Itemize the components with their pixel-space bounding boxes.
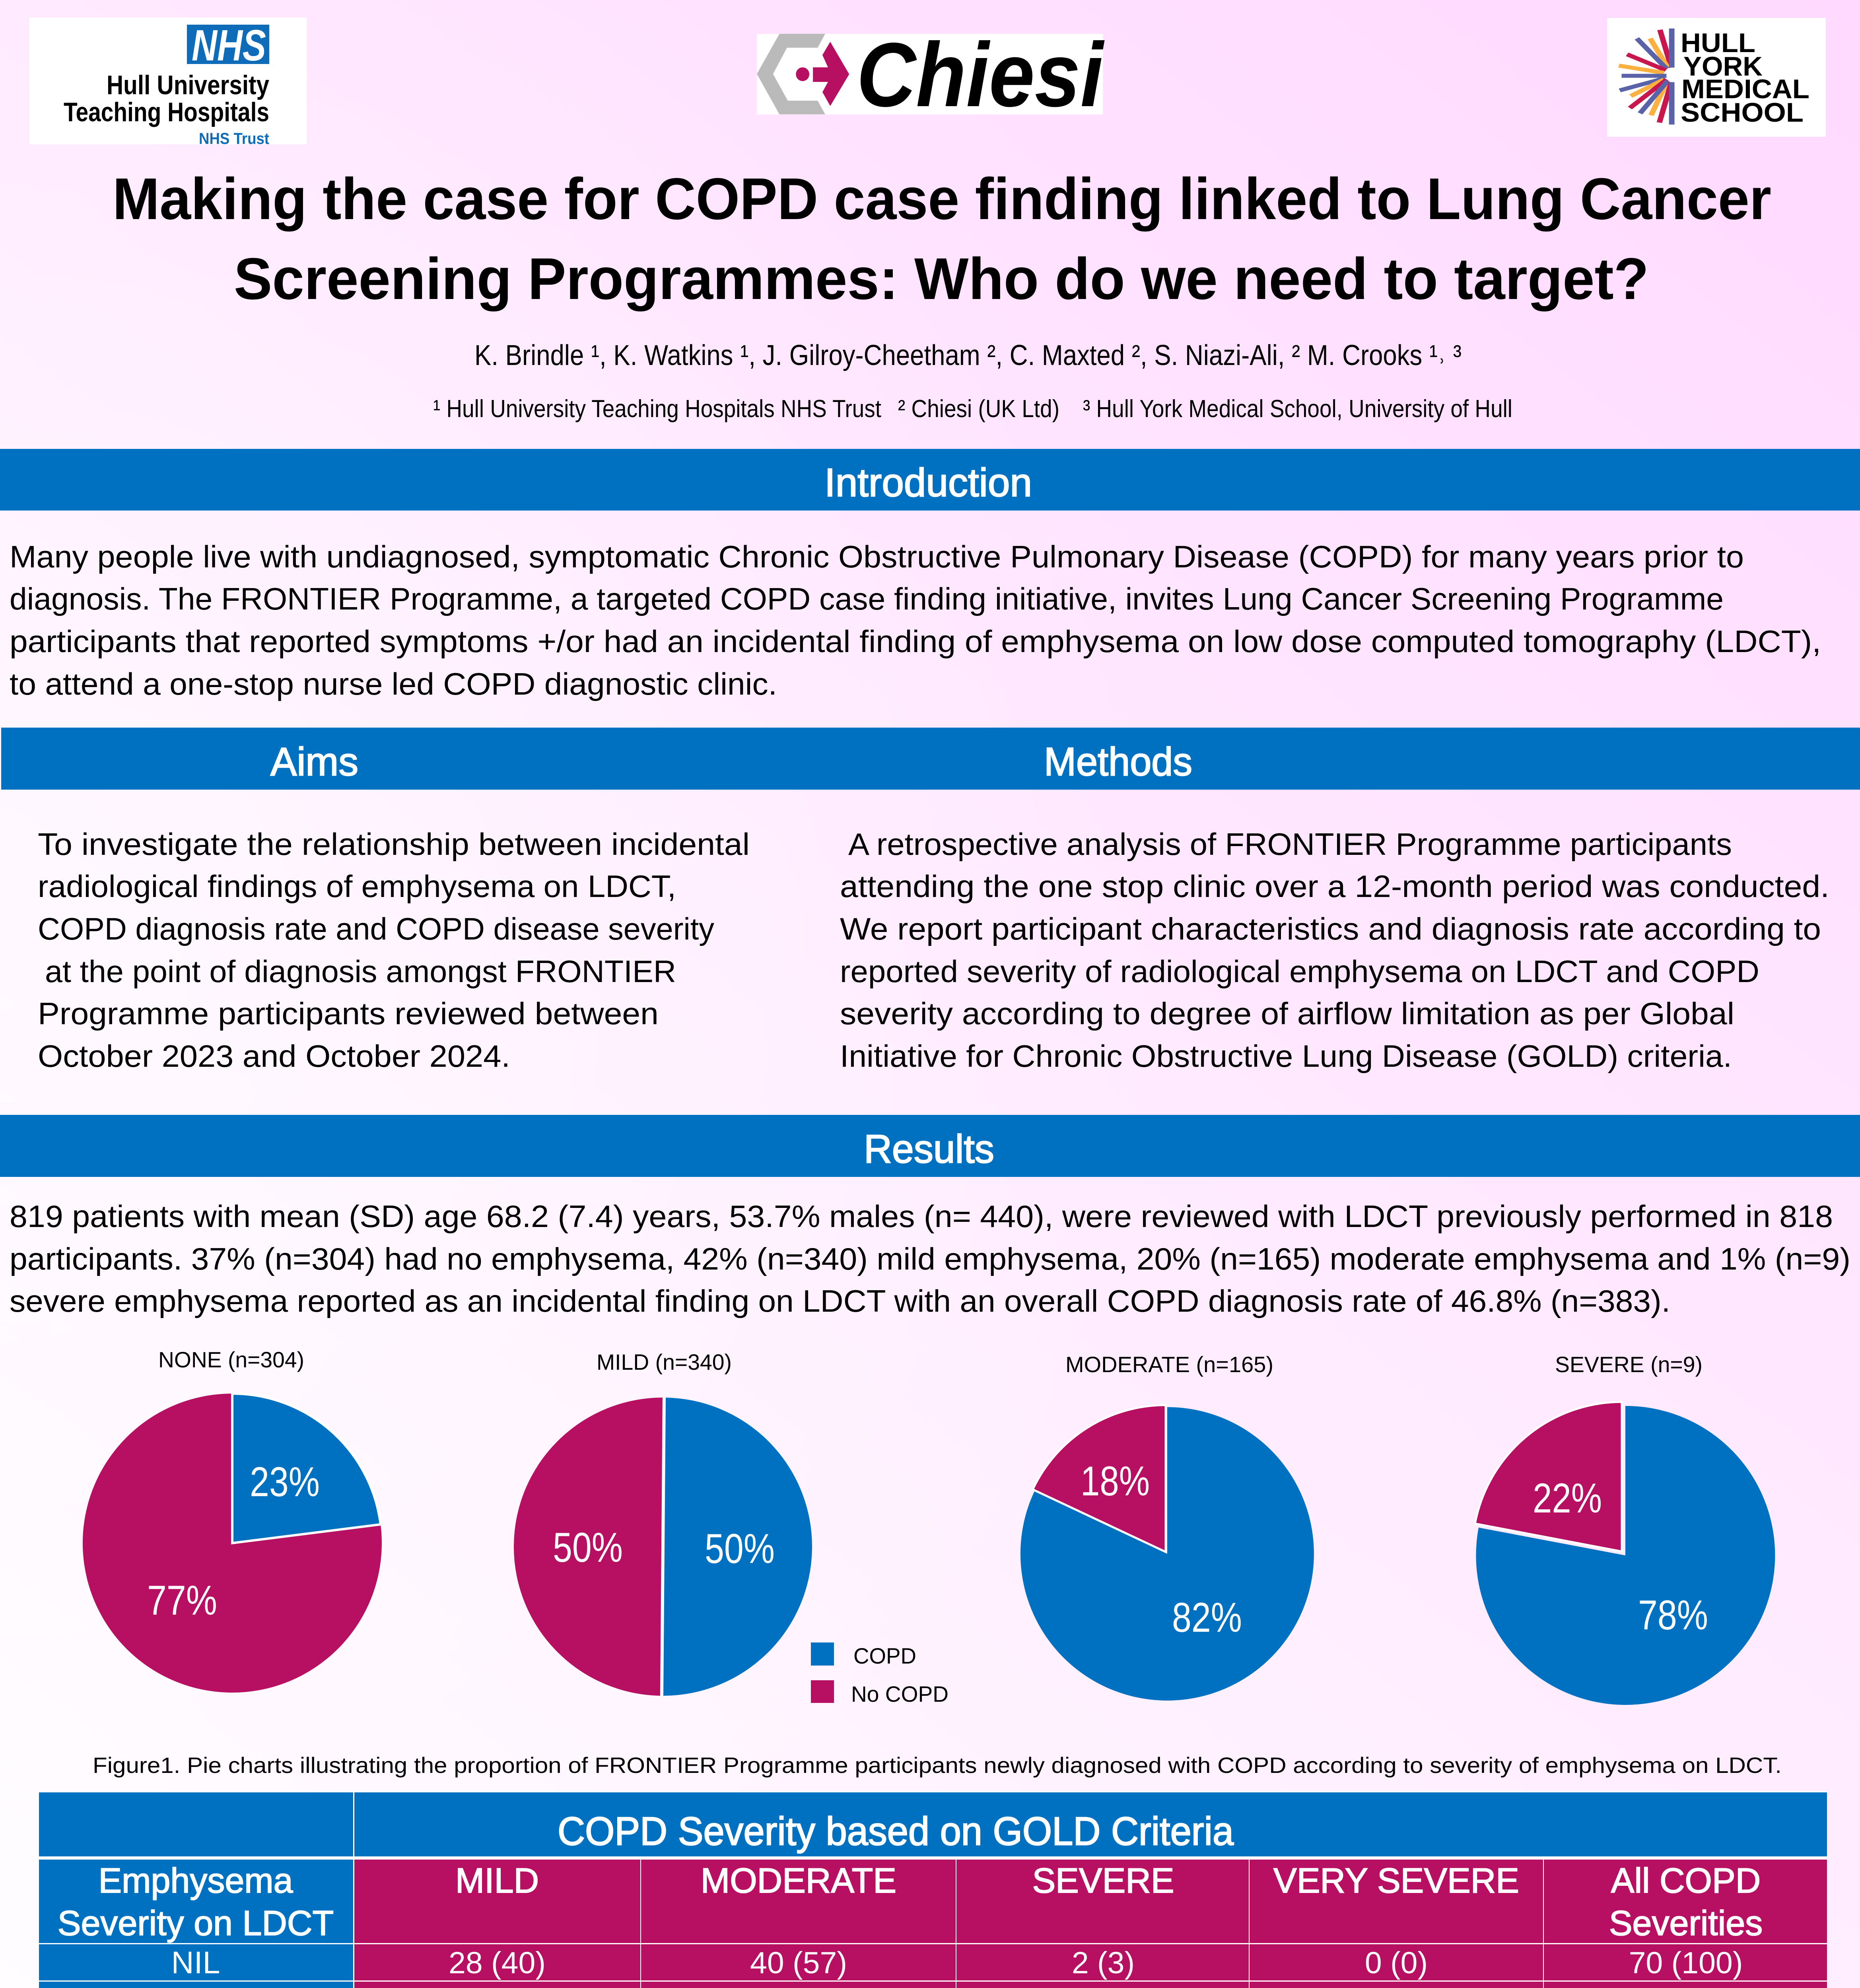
logo: NHS Hull University Teaching Hospitals: Teaching Hospitals — [64, 97, 269, 127]
pie chart: moderate: MODERATE (n=165) — [1065, 1352, 1273, 1377]
text block: introduction: to attend a one-stop nurse led COPD diagnostic clinic. — [10, 666, 777, 701]
text block: aims: radiological findings of emphysema on LDCT, — [38, 869, 676, 904]
table column headers: Emphysema — [98, 1861, 293, 1900]
logo: NHS Hull University Teaching Hospitals: NHS Trust — [199, 130, 269, 148]
table row: nil: 28 (40) — [449, 1946, 546, 1980]
table column headers: MILD — [455, 1861, 539, 1900]
table row: nil: 0 (0) — [1365, 1946, 1428, 1980]
text block: methods: Initiative for Chronic Obstructive Lung Disease (GOLD) criteria. — [840, 1039, 1732, 1074]
pie chart: moderate — [1020, 1352, 1314, 1701]
affiliations: ³ Hull York Medical School, University of Hull — [1083, 395, 1512, 423]
table column headers: SEVERE — [1032, 1861, 1174, 1900]
panel: aims and methods — [1, 728, 1860, 1074]
pie chart: none: NONE (n=304) — [158, 1347, 304, 1372]
table column headers: All COPD — [1611, 1861, 1761, 1900]
text block: methods: reported severity of radiological emphysema on LDCT and COPD — [840, 954, 1759, 989]
text block: results summary — [10, 1199, 1850, 1318]
affiliations — [433, 395, 1512, 423]
text block: methods: severity according to degree of airflow limitation as per Global — [840, 996, 1734, 1031]
pie chart: mild: 50% — [553, 1524, 623, 1571]
text block: methods — [840, 827, 1829, 1074]
pie chart: moderate: 82% — [1172, 1594, 1242, 1641]
text block: aims: Programme participants reviewed between — [38, 996, 659, 1031]
table row: nil: 70 (100) — [1629, 1946, 1743, 1980]
pie chart: severe: 78% — [1638, 1592, 1708, 1639]
text block: aims: COPD diagnosis rate and COPD disease severity — [38, 911, 714, 946]
heading: introduction: Introduction — [824, 460, 1032, 505]
panel: introduction — [0, 449, 1860, 701]
table row: nil: 2 (3) — [1072, 1946, 1135, 1980]
text block: aims: at the point of diagnosis amongst FRONTIER — [45, 954, 676, 989]
logo: NHS Hull University Teaching Hospitals: NHS — [192, 21, 266, 70]
logo: NHS Hull University Teaching Hospitals: Hull University — [107, 70, 269, 100]
table: COPD severity by emphysema severity — [39, 1791, 1827, 1988]
table row: nil — [171, 1945, 1743, 1980]
table header: GOLD criteria: COPD Severity based on GOLD Criteria — [558, 1809, 1234, 1854]
pie chart: severe: SEVERE (n=9) — [1555, 1352, 1703, 1377]
pie chart: moderate: 18% — [1081, 1458, 1150, 1505]
text block: introduction: diagnosis. The FRONTIER Programme, a targeted COPD case finding initiative, invites Lung Cancer Screening Programme — [10, 581, 1724, 616]
pie chart: mild: MILD (n=340) — [597, 1349, 732, 1375]
pie chart: none: 77% — [147, 1577, 217, 1624]
authors: K. Brindle ¹, K. Watkins ¹, J. Gilroy-Cheetham ², C. Maxted ², S. Niazi-Ali, ² M. Crooks ¹˒ ³ — [474, 340, 1462, 371]
logo: Hull York Medical School: SCHOOL — [1681, 97, 1804, 128]
text block: results summary: participants. 37% (n=304) had no emphysema, 42% (n=340) mild emphysema, 20% (n=165) moderate emphysema and 1% (n=9) — [10, 1241, 1850, 1276]
heading: methods: Methods — [1044, 740, 1192, 784]
title: Screening Programmes: Who do we need to target? — [234, 246, 1649, 312]
logo: Hull York Medical School — [1607, 18, 1826, 137]
pie chart: mild — [514, 1349, 812, 1696]
logo: Hull York Medical School: MEDICAL — [1681, 74, 1809, 104]
heading: results: Results — [864, 1127, 994, 1171]
legend — [811, 1642, 948, 1706]
text block: introduction: participants that reported symptoms +/or had an incidental finding of emphysema on low dose computed tomography (LDCT), — [10, 624, 1821, 659]
affiliations: ² Chiesi (UK Ltd) — [898, 395, 1059, 423]
text block: methods: We report participant characteristics and diagnosis rate according to — [840, 911, 1821, 946]
pie chart: none — [83, 1347, 382, 1693]
panel: results — [0, 1115, 1860, 1988]
table column headers: MODERATE — [701, 1861, 896, 1900]
legend: COPD — [853, 1643, 916, 1668]
logo: Chiesi: Chiesi — [857, 24, 1105, 126]
title — [113, 166, 1771, 312]
table column headers: Severities — [1609, 1903, 1763, 1943]
pie chart: mild: 50% — [705, 1526, 775, 1572]
table row: nil: 40 (57) — [750, 1946, 847, 1980]
text block: introduction: Many people live with undiagnosed, symptomatic Chronic Obstructive Pulmonary Disease (COPD) for many years prior to — [10, 539, 1744, 574]
text block: results summary: 819 patients with mean (SD) age 68.2 (7.4) years, 53.7% males (n= 440), were reviewed with LDCT previously performed in 818 — [10, 1199, 1833, 1234]
table column headers: Severity on LDCT — [58, 1903, 334, 1943]
logo: Chiesi — [757, 24, 1105, 126]
text block: aims — [38, 827, 750, 1074]
heading: aims: Aims — [270, 740, 358, 784]
logo: Hull York Medical School: YORK — [1683, 51, 1763, 82]
table column headers: VERY SEVERE — [1273, 1861, 1519, 1900]
text block: methods: attending the one stop clinic over a 12-month period was conducted. — [840, 869, 1829, 904]
text block: introduction — [10, 539, 1821, 701]
affiliations: ¹ Hull University Teaching Hospitals NHS Trust — [433, 395, 881, 423]
pie chart: severe: 22% — [1533, 1475, 1602, 1522]
logo: NHS Hull University Teaching Hospitals — [29, 17, 307, 148]
text block: results summary: severe emphysema reported as an incidental finding on LDCT with an overall COPD diagnosis rate of 46.8% (n=383). — [10, 1283, 1670, 1318]
table row: nil: NIL — [171, 1945, 220, 1980]
pie chart: severe — [1475, 1352, 1775, 1705]
text block: aims: October 2023 and October 2024. — [38, 1039, 510, 1074]
pie chart: none: 23% — [250, 1459, 320, 1505]
figure caption: Figure1. Pie charts illustrating the proportion of FRONTIER Programme participants newly diagnosed with COPD according to severity of emphysema on LDCT. — [93, 1753, 1782, 1778]
table row: mild — [158, 1982, 1751, 1988]
title: Making the case for COPD case finding linked to Lung Cancer — [113, 166, 1771, 232]
logo: Hull York Medical School: HULL — [1681, 28, 1755, 58]
text block: aims: To investigate the relationship between incidental — [38, 827, 750, 862]
legend: No COPD — [851, 1681, 948, 1706]
table column headers — [58, 1861, 1763, 1943]
text block: methods: A retrospective analysis of FRONTIER Programme participants — [848, 827, 1732, 862]
